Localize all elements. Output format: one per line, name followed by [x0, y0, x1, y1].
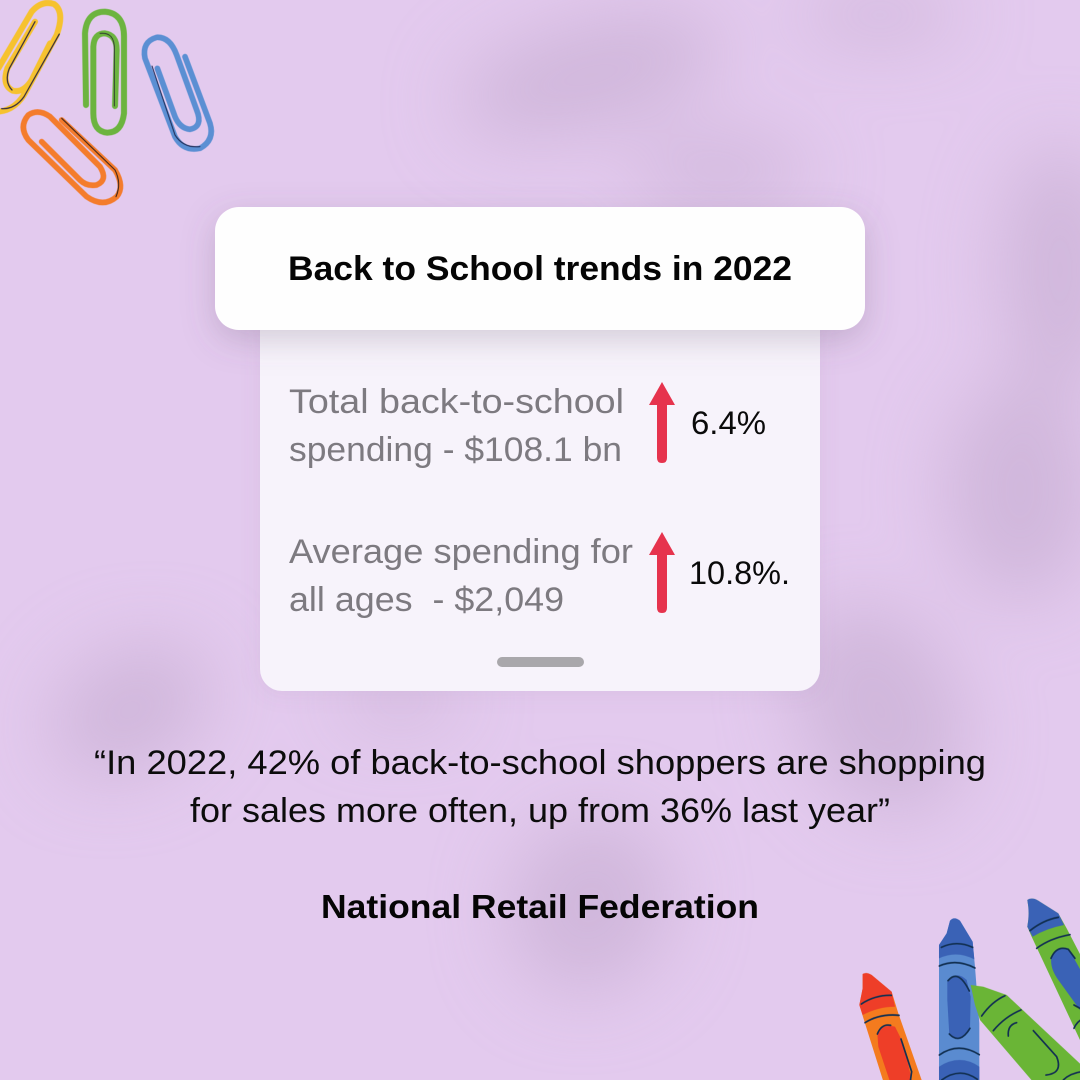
icon: green crayon (middle) — [971, 985, 1080, 1080]
icon: orange paper clip — [23, 112, 120, 202]
arrow: up 10.8% — [649, 532, 675, 613]
text: average spending label — [289, 533, 633, 619]
stat row: average spending — [289, 532, 790, 619]
value: 10.8%: 10.8%. — [689, 555, 790, 591]
text: total spending label — [289, 383, 624, 469]
panel: title card — [215, 207, 865, 330]
icon: yellow paper clip — [0, 3, 60, 112]
text: average spending label: all ages - $2,049 — [289, 581, 564, 619]
quote text — [94, 744, 986, 830]
value: 6.4%: 6.4% — [691, 405, 766, 441]
icon: green paper clip — [85, 12, 124, 133]
icon: blue crayon (centre) — [939, 918, 979, 1080]
text: total spending label: Total back-to-school — [289, 383, 624, 421]
panel: stats card — [260, 280, 820, 691]
text: average spending label: Average spending for — [289, 533, 633, 571]
stat row: total spending — [289, 382, 766, 469]
crayons — [859, 898, 1080, 1080]
quote source: National Retail Federation — [321, 888, 759, 925]
icon: red crayon — [859, 973, 924, 1080]
heading: Back to School trends in 2022 — [288, 250, 792, 288]
paper clips — [0, 3, 211, 202]
icon: blue paper clip — [144, 37, 211, 149]
icon: green crayon (right) — [1027, 898, 1080, 1061]
quote text: “In 2022, 42% of back-to-school shoppers are shopping — [94, 744, 986, 782]
arrow: up 6.4% — [649, 382, 675, 463]
text: total spending label: spending - $108.1 bn — [289, 431, 622, 469]
quote text: for sales more often, up from 36% last year” — [190, 792, 890, 830]
handle bar — [497, 657, 584, 667]
